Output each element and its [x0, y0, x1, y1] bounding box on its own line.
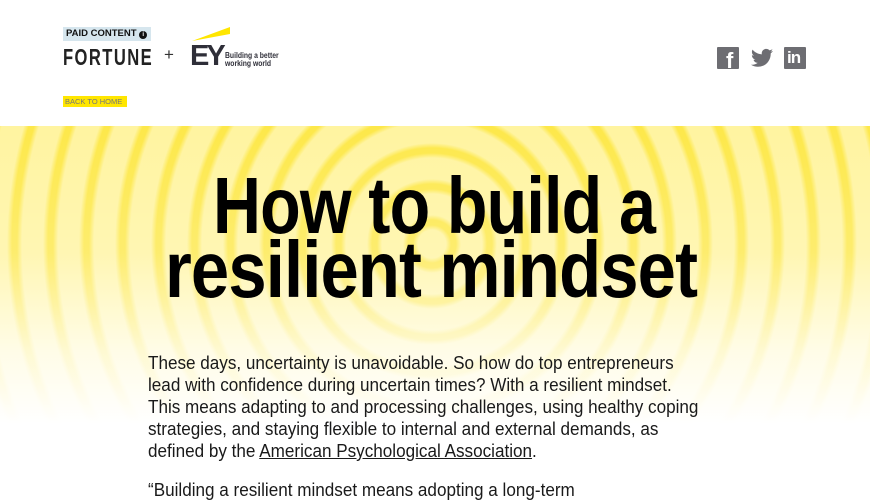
- icon: twitter: [751, 48, 773, 67]
- paid content tag: i: [142, 32, 144, 38]
- logo: EY: EY: [190, 40, 223, 72]
- intro paragraph: [148, 353, 698, 500]
- plus: +: [164, 45, 174, 64]
- title: [165, 161, 698, 314]
- icon: linkedin: in: [787, 48, 800, 67]
- background: yellow concentric rings: [0, 126, 870, 489]
- social icons: [717, 47, 806, 69]
- paid content tag: [63, 27, 151, 41]
- icon: facebook: [717, 47, 739, 69]
- icon: linkedin: [784, 47, 806, 69]
- intro paragraph: This means adapting to and processing challenges, using healthy coping: [148, 397, 698, 417]
- intro paragraph: lead with confidence during uncertain times? With a resilient mindset.: [148, 375, 672, 395]
- logo: EY: working world: [225, 59, 271, 68]
- logo: EY: Building a better: [225, 51, 279, 60]
- title: resilient mindset: [165, 225, 697, 314]
- logo: EY: [190, 27, 279, 72]
- intro paragraph: These days, uncertainty is unavoidable. So how do top entrepreneurs: [148, 353, 674, 373]
- logo: fortune: FORTUNE: [63, 44, 153, 70]
- back to home link: BACK TO HOME: [65, 97, 122, 106]
- paid content tag: PAID CONTENT: [66, 28, 137, 39]
- intro paragraph: strategies, and staying flexible to internal and external demands, as: [148, 419, 658, 439]
- title: How to build a: [213, 161, 655, 250]
- text: “Building a resilient mindset means adopting a long-term: [148, 480, 575, 500]
- intro paragraph: defined by the American Psychological Association.: [148, 441, 537, 461]
